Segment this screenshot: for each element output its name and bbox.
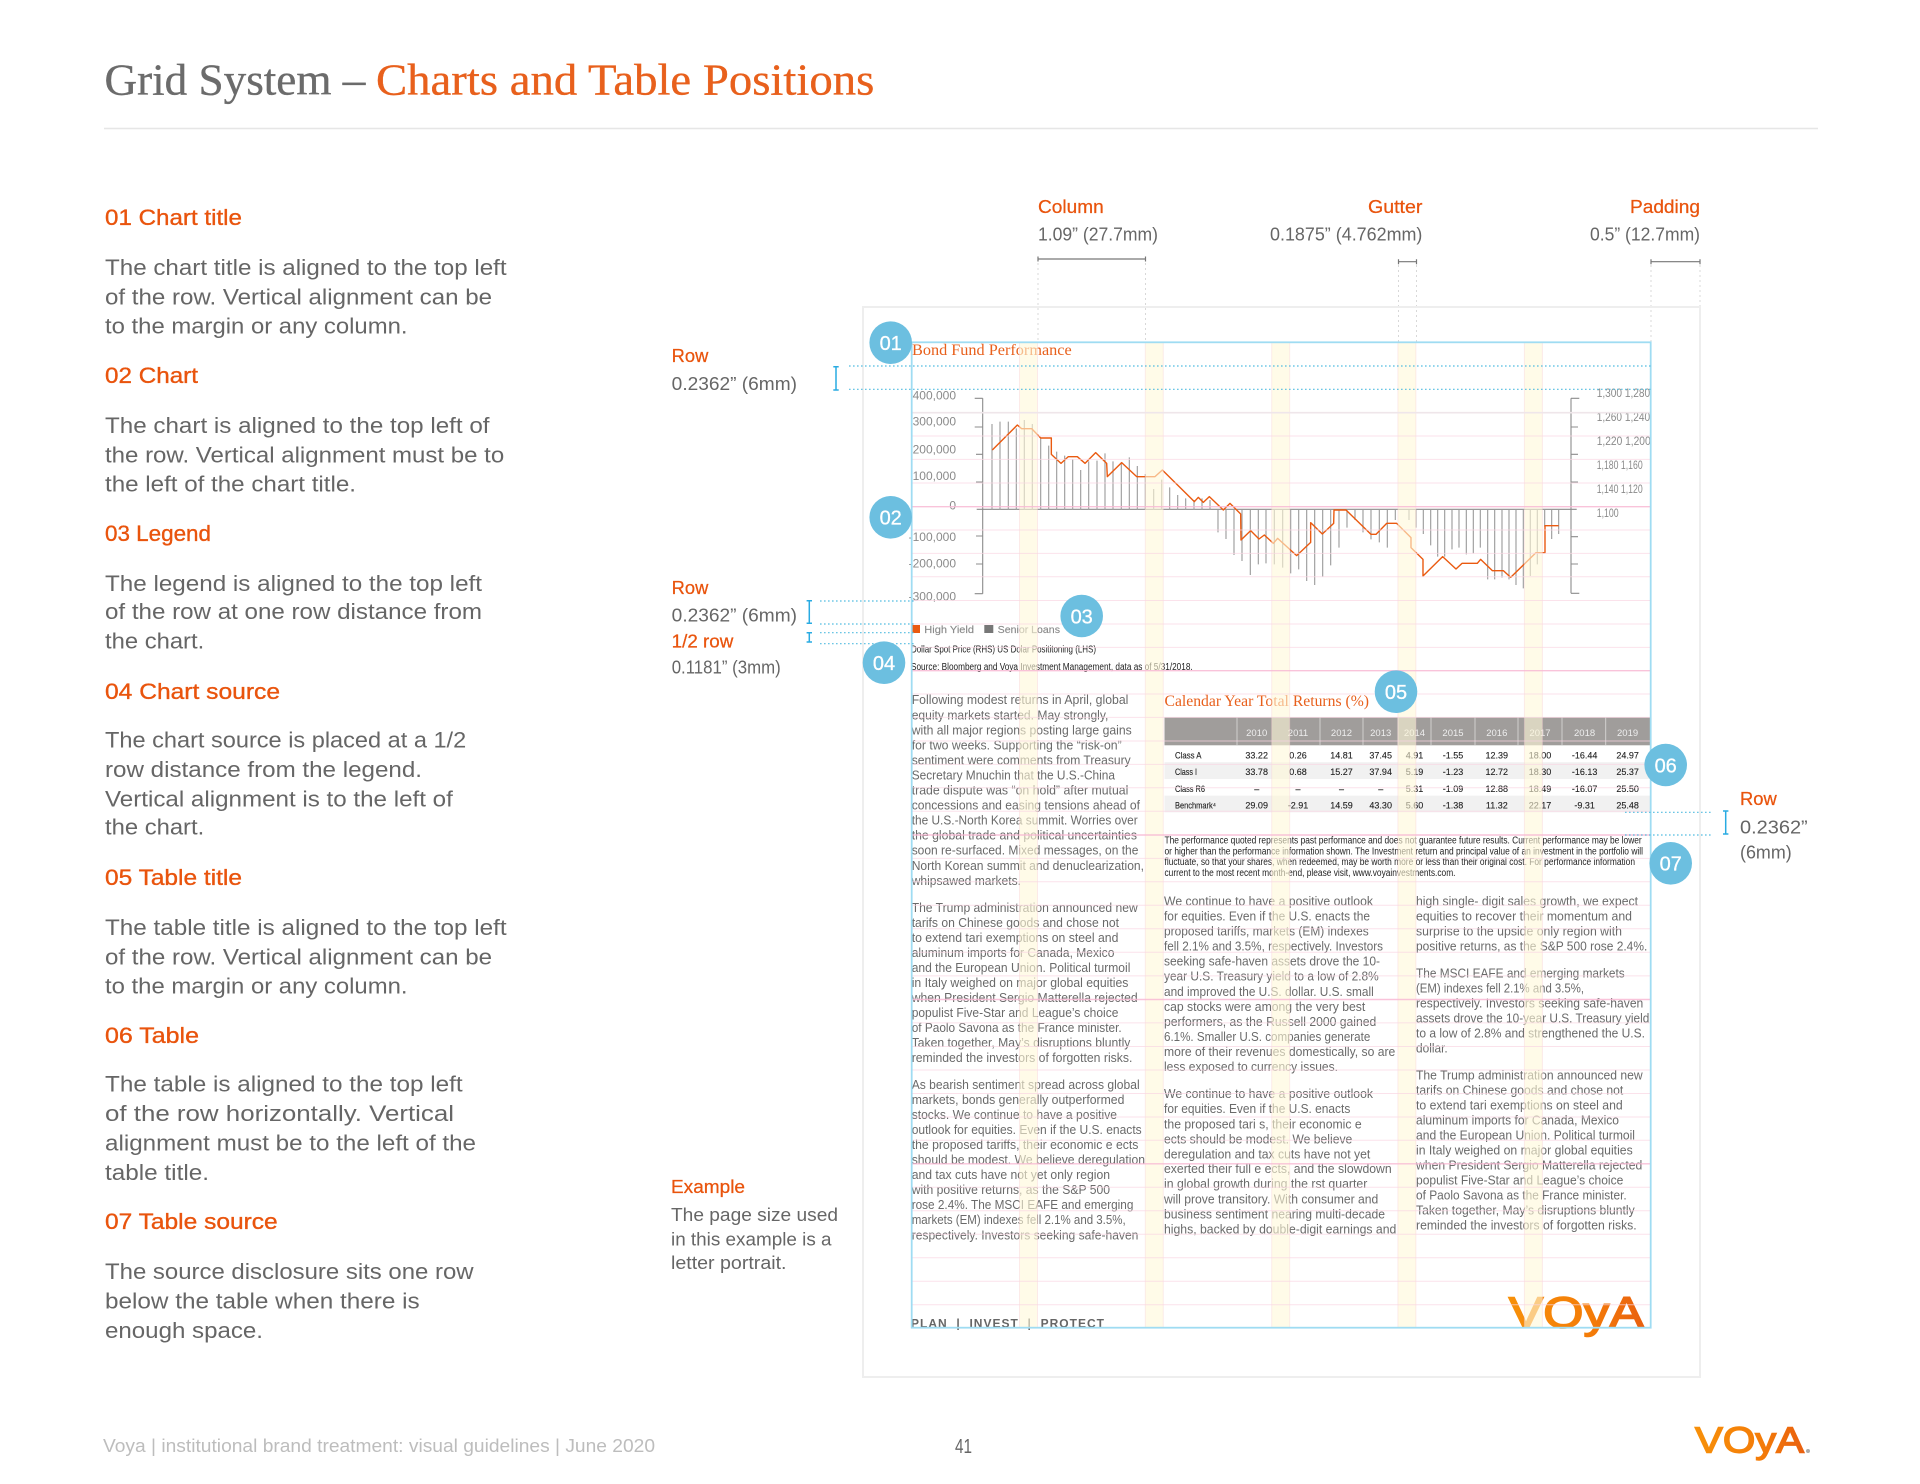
- row class i: 15.27: [1330, 767, 1353, 777]
- section 03 legend: of the row at one row distance from: [105, 599, 482, 624]
- body text column 3: [1415, 894, 1649, 1232]
- legend: High Yield: [924, 624, 974, 636]
- left axis labels: 200,000: [913, 442, 956, 456]
- body text column 3: positive returns, as the S&P 500 rose 2.4%.: [1416, 940, 1647, 954]
- row class r6: -1.09: [1443, 784, 1463, 794]
- annotation: column measure: 1.09” (27.7mm): [1038, 224, 1158, 244]
- annotation: row and half row: 0.1181” (3mm): [672, 657, 781, 677]
- logo: page voya: VOyA: [1509, 1289, 1645, 1338]
- row benchmark: 25.48: [1616, 800, 1639, 810]
- body text column 2: performers, as the Russell 2000 gained: [1164, 1015, 1376, 1029]
- table header: 2013: [1370, 728, 1391, 739]
- body text column 3: to a low of 2.8% and strengthened the U.S.: [1416, 1027, 1645, 1041]
- left axis labels: 300,000: [913, 414, 956, 428]
- body text column 2: for equities. Even if the U.S. enacts: [1164, 1102, 1350, 1116]
- table header: 2014: [1404, 728, 1425, 739]
- row class a: 14.81: [1330, 750, 1353, 760]
- section 07 table source: enough space.: [105, 1318, 263, 1343]
- body text column 1: [911, 693, 1145, 1242]
- title: Grid System –: [104, 56, 366, 104]
- section 05 table title: [105, 865, 507, 999]
- row benchmark: Benchmark⁴: [1175, 800, 1216, 810]
- badge 01: 01: [880, 333, 902, 355]
- right axis labels: 1,220 1,200: [1597, 434, 1651, 448]
- section 07 table source: [105, 1209, 474, 1343]
- row benchmark: 5.60: [1406, 800, 1423, 810]
- body text column 3: assets drove the 10-year U.S. Treasury yield: [1416, 1012, 1649, 1026]
- row benchmark: 29.09: [1245, 800, 1268, 810]
- body text column 2: in global growth during the rst quarter: [1164, 1177, 1367, 1191]
- row class a: [1175, 750, 1639, 760]
- body text column 1: Following modest returns in April, global: [912, 693, 1128, 707]
- body text column 1: and the European Union. Political turmoil: [912, 961, 1130, 975]
- badge 03: 03: [1071, 606, 1093, 628]
- body text column 1: aluminum imports for Canada, Mexico: [912, 946, 1114, 960]
- table header: 2016: [1486, 728, 1507, 739]
- body text column 1: respectively. Investors seeking safe-haven: [912, 1228, 1138, 1242]
- section 01 chart title: to the margin or any column.: [105, 314, 408, 339]
- body text column 1: North Korean summit and denuclearization,: [912, 859, 1144, 873]
- panel: left guideline text: [105, 205, 507, 1343]
- row benchmark: 43.30: [1369, 800, 1392, 810]
- body text column 2: [1163, 894, 1396, 1236]
- section 02 chart: the left of the chart title.: [105, 472, 356, 497]
- section 01 chart title: 01 Chart title: [105, 205, 242, 230]
- row class i: -1.23: [1443, 767, 1463, 777]
- body text column 2: business sentiment nearing multi-decade: [1164, 1207, 1385, 1221]
- body text column 2: more of their revenues domestically, so are: [1164, 1045, 1395, 1059]
- body text column 2: will prove transitory. With consumer and: [1163, 1192, 1378, 1206]
- left axis labels: 100,000: [913, 469, 956, 483]
- row class r6: –: [1295, 784, 1301, 794]
- body text column 1: outlook for equities. Even if the U.S. enacts: [912, 1123, 1142, 1137]
- row class a: 12.39: [1486, 750, 1508, 760]
- body text column 1: rose 2.4%. The MSCI EAFE and emerging: [912, 1198, 1133, 1212]
- body text column 1: of Paolo Savona as the France minister.: [912, 1021, 1122, 1035]
- row class i: 25.37: [1616, 767, 1639, 777]
- badge 03: [1060, 595, 1103, 637]
- section 03 legend: [105, 521, 482, 653]
- row class r6: 18.49: [1529, 784, 1551, 794]
- section 04 chart source: The chart source is placed at a 1/2: [105, 728, 466, 753]
- badge 04: 04: [873, 653, 895, 675]
- left axis labels: -100,000: [909, 530, 956, 544]
- section 02 chart: the row. Vertical alignment must be to: [105, 442, 504, 467]
- body text column 2: ects should be modest. We believe: [1164, 1132, 1352, 1146]
- row class i: Class I: [1175, 767, 1197, 777]
- badge 06: 06: [1655, 755, 1677, 777]
- chart: bond fund performance: [909, 386, 1651, 604]
- row class a: -16.44: [1572, 750, 1597, 760]
- body text column 1: stocks. We continue to have a positive: [912, 1108, 1117, 1122]
- body text column 1: The Trump administration announced new: [912, 901, 1139, 915]
- tagline: PLAN | INVEST | PROTECT: [911, 1316, 1105, 1330]
- left axis labels: 0: [949, 498, 956, 512]
- body text column 3: when President Sergio Matterella rejected: [1415, 1159, 1642, 1173]
- section 07 table source: below the table when there is: [105, 1288, 420, 1313]
- annotation: row right: 0.2362”: [1740, 817, 1808, 837]
- body text column 2: proposed tariffs, markets (EM) indexes: [1164, 925, 1369, 939]
- body text column 1: the U.S.-North Korea summit. Worries over: [912, 814, 1138, 828]
- right axis labels: 1,260 1,240: [1597, 410, 1650, 424]
- row class a: 0.26: [1289, 750, 1307, 760]
- table source: or higher than the performance information shown. The Investment return and principal value of an investment in the portfolio will: [1164, 846, 1643, 857]
- row class r6: –: [1378, 784, 1383, 794]
- annotation: padding measure: 0.5” (12.7mm): [1590, 224, 1700, 244]
- annotation: row and half row: Row: [672, 578, 709, 598]
- badge 02: [869, 496, 912, 539]
- left axis labels: 400,000: [913, 388, 956, 402]
- section 03 legend: the chart.: [105, 628, 204, 653]
- legend: Senior Loans: [998, 624, 1060, 636]
- annotation: row right: Row: [1740, 789, 1778, 809]
- badge 05: 05: [1385, 682, 1407, 704]
- annotation: example note: Example: [671, 1177, 745, 1197]
- section 05 table title: 05 Table title: [105, 865, 242, 890]
- body text column 1: the global trade and political uncertainties: [912, 829, 1137, 843]
- row class a: 4.91: [1406, 750, 1423, 760]
- body text column 1: Secretary Mnuchin that the U.S.-China: [912, 768, 1115, 782]
- row class i: [1175, 767, 1639, 777]
- left axis labels: [909, 388, 956, 604]
- chart source: Source: Bloomberg and Voya Investment Management, data as of 5/31/2018.: [911, 662, 1193, 673]
- section 07 table source: 07 Table source: [105, 1209, 278, 1234]
- table source: current to the most recent month-end, please visit, www.voyainvestments.com.: [1164, 868, 1456, 879]
- row class i: 5.19: [1406, 767, 1423, 777]
- row class a: 24.97: [1616, 750, 1639, 760]
- annotation: example note: letter portrait.: [671, 1253, 786, 1273]
- left axis labels: -300,000: [909, 590, 956, 604]
- right axis labels: 1,100: [1597, 506, 1619, 520]
- body text column 3: tarifs on Chinese goods and chose not: [1416, 1084, 1624, 1098]
- body text column 2: for equities. Even if the U.S. enacts the: [1164, 910, 1370, 924]
- table header: 2011: [1288, 728, 1308, 739]
- body text column 1: to extend tari exemptions on steel and: [912, 931, 1118, 945]
- body text column 1: the proposed tariffs, their economic e ects: [912, 1138, 1138, 1152]
- annotation: row top: Row: [672, 346, 709, 366]
- section 02 chart: [105, 363, 504, 497]
- annotation: example note: The page size used: [671, 1205, 838, 1225]
- row class r6: [1175, 784, 1639, 794]
- row class a: -1.55: [1443, 750, 1463, 760]
- row benchmark: 22.17: [1529, 800, 1551, 810]
- badge 07: [1649, 842, 1692, 885]
- row class a: 37.45: [1369, 750, 1392, 760]
- body text column 1: and tax cuts have not yet only region: [912, 1168, 1110, 1182]
- annotation: gutter measure: 0.1875” (4.762mm): [1270, 224, 1422, 244]
- chart source: Dollar Spot Price (RHS) US Dolar Posititoning (LHS): [911, 644, 1096, 656]
- body text column 3: dollar.: [1416, 1042, 1448, 1056]
- table header: 2019: [1617, 728, 1638, 739]
- body text column 1: Taken together, May’s disruptions bluntly: [912, 1036, 1131, 1050]
- body text column 1: tarifs on Chinese goods and chose not: [912, 916, 1120, 930]
- body text column 1: reminded the investors of forgotten risks.: [912, 1051, 1132, 1065]
- body text column 1: sentiment were comments from Treasury: [912, 753, 1131, 767]
- row class r6: –: [1339, 784, 1344, 794]
- body text column 1: should be modest. We believe deregulation: [912, 1153, 1145, 1167]
- legend: [912, 624, 1060, 636]
- annotation: gutter measure: Gutter: [1368, 197, 1422, 217]
- section 05 table title: The table title is aligned to the top left: [105, 915, 507, 940]
- section 06 table: The table is aligned to the top left: [105, 1072, 463, 1097]
- section 05 table title: of the row. Vertical alignment can be: [105, 944, 492, 969]
- title: [104, 56, 874, 104]
- table header: 2012: [1331, 728, 1352, 739]
- badge 01: [869, 321, 912, 364]
- table header: 2010: [1246, 728, 1267, 739]
- body text column 3: high single- digit sales growth, we expect: [1416, 894, 1638, 908]
- row class i: 37.94: [1369, 767, 1392, 777]
- example page outline: [863, 307, 1700, 1377]
- body text column 1: for two weeks. Supporting the “risk-on”: [912, 738, 1122, 752]
- footer text: Voya | institutional brand treatment: visual guidelines | June 2020: [103, 1436, 655, 1456]
- body text column 1: As bearish sentiment spread across global: [912, 1078, 1140, 1092]
- row benchmark: -2.91: [1288, 800, 1308, 810]
- body text column 3: reminded the investors of forgotten risks.: [1416, 1218, 1637, 1232]
- section 04 chart source: 04 Chart source: [105, 679, 280, 704]
- body text column 1: when President Sergio Matterella rejected: [911, 991, 1138, 1005]
- body text column 2: cap stocks were among the very best: [1164, 1000, 1366, 1014]
- annotation: row top: [672, 346, 839, 394]
- annotation: row top: 0.2362” (6mm): [672, 374, 797, 394]
- section 06 table: alignment must be to the left of the: [105, 1130, 476, 1156]
- annotation: example note: [671, 1177, 838, 1273]
- body text column 3: of Paolo Savona as the France minister.: [1416, 1188, 1627, 1202]
- right axis labels: [1597, 386, 1651, 520]
- badge 04: [863, 641, 905, 684]
- body text column 1: markets (EM) indexes fell 2.1% and 3.5%,: [912, 1213, 1126, 1227]
- section 01 chart title: of the row. Vertical alignment can be: [105, 284, 492, 309]
- row stripes: [1164, 771, 1650, 804]
- row class a: 33.22: [1245, 750, 1268, 760]
- table source: The performance quoted represents past performance and does not guarantee future results. Current performance may be lower: [1164, 835, 1642, 846]
- right axis labels: 1,300 1,280: [1597, 386, 1650, 400]
- body text column 3: aluminum imports for Canada, Mexico: [1416, 1114, 1619, 1128]
- title: Charts and Table Positions: [376, 56, 874, 104]
- annotation: row and half row: [672, 578, 812, 677]
- left axis labels: -200,000: [909, 556, 956, 570]
- body text column 1: populist Five-Star and League’s choice: [912, 1006, 1118, 1020]
- senior loans bars: [992, 420, 1559, 588]
- body text column 2: 6.1%. Smaller U.S. companies generate: [1164, 1030, 1370, 1044]
- row class r6: 25.50: [1616, 784, 1639, 794]
- row class i: 33.78: [1245, 767, 1268, 777]
- row benchmark: 14.59: [1330, 800, 1353, 810]
- section 01 chart title: [105, 205, 507, 339]
- body text column 3: surprise to the upside only region with: [1416, 925, 1622, 939]
- section 02 chart: 02 Chart: [105, 363, 198, 388]
- body text column 2: We continue to have a positive outlook: [1164, 1087, 1374, 1101]
- body text column 1: soon re-surfaced. Mixed messages, on the: [912, 844, 1138, 858]
- body text column 1: whipsawed markets.: [911, 874, 1021, 888]
- axes: [975, 398, 1579, 594]
- panel: example page: [909, 342, 1651, 1338]
- section 04 chart source: [105, 679, 466, 840]
- body text column 3: populist Five-Star and League’s choice: [1416, 1174, 1623, 1188]
- row benchmark: -9.31: [1574, 800, 1595, 810]
- row class a: Class A: [1175, 750, 1202, 760]
- annotation: column measure: Column: [1038, 197, 1104, 217]
- section 04 chart source: row distance from the legend.: [105, 757, 422, 782]
- section 06 table: 06 Table: [105, 1023, 199, 1048]
- annotation: row and half row: 0.2362” (6mm): [672, 606, 797, 626]
- row class r6: -16.07: [1572, 784, 1597, 794]
- badge 05: [1375, 670, 1417, 713]
- body text column 1: in Italy weighed on major global equities: [912, 976, 1128, 990]
- annotation: row and half row: 1/2 row: [672, 631, 734, 651]
- section 03 legend: 03 Legend: [105, 521, 211, 546]
- section 04 chart source: the chart.: [105, 814, 204, 840]
- body text column 2: exerted their full e ects, and the slowdown: [1164, 1162, 1392, 1176]
- body text column 1: concessions and easing tensions ahead of: [912, 799, 1141, 813]
- chart title: Bond Fund Performance: [912, 342, 1072, 359]
- row class a: 18.00: [1529, 750, 1551, 760]
- row class i: 18.30: [1529, 767, 1551, 777]
- body text column 3: in Italy weighed on major global equities: [1416, 1144, 1633, 1158]
- body text column 2: less exposed to currency issues.: [1164, 1060, 1338, 1074]
- section 03 legend: The legend is aligned to the top left: [105, 571, 482, 596]
- badge 06: [1644, 744, 1687, 786]
- section 01 chart title: The chart title is aligned to the top left: [105, 255, 507, 280]
- body text column 3: and the European Union. Political turmoil: [1416, 1129, 1635, 1143]
- body text column 2: We continue to have a positive outlook: [1164, 894, 1374, 908]
- body text column 2: fell 2.1% and 3.5%, respectively. Investors: [1164, 940, 1383, 954]
- section 02 chart: The chart is aligned to the top left of: [105, 413, 490, 438]
- annotation: column measure: [1038, 197, 1158, 262]
- row class r6: Class R6: [1175, 784, 1205, 794]
- annotation: row right: (6mm): [1740, 842, 1792, 862]
- table header: 2015: [1442, 728, 1464, 739]
- row class r6: 12.88: [1486, 784, 1508, 794]
- annotation: example note: in this example is a: [671, 1230, 833, 1250]
- annotation: row right: [1723, 789, 1808, 862]
- table source: fluctuate, so that your shares, when redeemed, may be worth more or less than their original cost. For performance information: [1164, 857, 1635, 868]
- body text column 1: markets, bonds generally outperformed: [912, 1093, 1124, 1107]
- body text column 1: with all major regions posting large gains: [911, 723, 1132, 737]
- annotation: gutter measure: [1270, 197, 1422, 264]
- body text column 1: trade dispute was “on hold” after mutual: [912, 784, 1128, 798]
- body text column 2: seeking safe-haven assets drove the 10-: [1164, 955, 1380, 969]
- body text column 2: and improved the U.S. dollar. U.S. small: [1164, 985, 1374, 999]
- table title: Calendar Year Total Returns (%): [1164, 693, 1369, 710]
- body text column 2: highs, backed by double-digit earnings and: [1164, 1222, 1396, 1236]
- section 06 table: [105, 1023, 476, 1185]
- section 06 table: table title.: [105, 1160, 209, 1185]
- row class i: 12.72: [1486, 767, 1508, 777]
- table header: 2018: [1574, 728, 1595, 739]
- body text column 3: Taken together, May’s disruptions bluntly: [1416, 1204, 1635, 1218]
- row class r6: 5.31: [1406, 784, 1423, 794]
- row benchmark: -1.38: [1443, 800, 1463, 810]
- row benchmark: 11.32: [1486, 800, 1508, 810]
- high yield line: [992, 425, 1559, 577]
- annotation: padding measure: [1590, 197, 1700, 264]
- body text column 1: equity markets started. May strongly,: [912, 708, 1108, 722]
- annotation: padding measure: Padding: [1630, 197, 1700, 217]
- body text column 3: respectively. Investors seeking safe-haven: [1416, 997, 1643, 1011]
- body text column 2: year U.S. Treasury yield to a low of 2.8%: [1164, 970, 1379, 984]
- right axis labels: 1,140 1,120: [1597, 482, 1643, 496]
- body text column 2: deregulation and tax cuts have not yet: [1164, 1147, 1371, 1161]
- body text column 3: to extend tari exemptions on steel and: [1416, 1099, 1623, 1113]
- row class i: -16.13: [1572, 767, 1597, 777]
- section 07 table source: The source disclosure sits one row: [105, 1259, 474, 1284]
- gutter bands overlay: [1020, 342, 1542, 1328]
- table header: 2017: [1529, 728, 1551, 739]
- table header: [1164, 717, 1650, 745]
- row class i: 0.68: [1289, 767, 1307, 777]
- badge 02: 02: [880, 508, 902, 530]
- badge 07: 07: [1660, 854, 1682, 876]
- right axis labels: 1,180 1,160: [1597, 458, 1643, 472]
- chart source: [911, 644, 1193, 673]
- body text column 1: with positive returns, as the S&P 500: [911, 1183, 1110, 1197]
- section 04 chart source: Vertical alignment is to the left of: [105, 786, 454, 811]
- logo: footer voya: VOyA: [1695, 1420, 1804, 1461]
- body text column 3: The MSCI EAFE and emerging markets: [1416, 966, 1625, 980]
- row class r6: –: [1254, 784, 1259, 794]
- body text column 3: The Trump administration announced new: [1416, 1068, 1644, 1082]
- table: calendar year returns: [1164, 717, 1650, 810]
- page number: 41: [955, 1436, 972, 1458]
- row benchmark: [1175, 800, 1639, 810]
- body text column 2: the proposed tari s, their economic e: [1164, 1117, 1362, 1131]
- table source: [1164, 835, 1643, 879]
- section 06 table: of the row horizontally. Vertical: [105, 1101, 454, 1126]
- section 05 table title: to the margin or any column.: [105, 974, 408, 999]
- body text column 3: (EM) indexes fell 2.1% and 3.5%,: [1416, 982, 1584, 996]
- body text column 3: equities to recover their momentum and: [1416, 910, 1632, 924]
